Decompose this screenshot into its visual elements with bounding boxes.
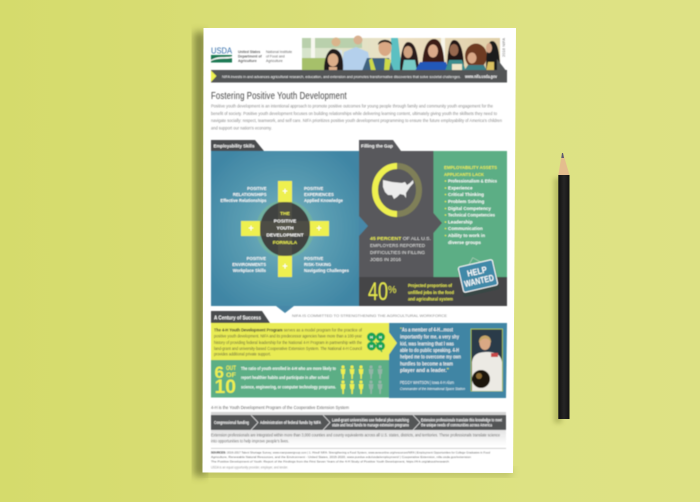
step: land-grant xyxy=(332,418,410,428)
extension paragraph xyxy=(211,430,506,446)
icon: 4-H clover: H xyxy=(379,344,382,348)
list: employability assets: Leadership xyxy=(448,220,473,224)
label: positive experiences: POSITIVE xyxy=(304,186,324,191)
label: positive environments: Workplace Skills xyxy=(233,268,267,273)
text: projected proportion: unfilled jobs in the food xyxy=(408,290,454,295)
quote attribution xyxy=(400,380,465,391)
quote text: kid, was learning that I was xyxy=(400,342,454,348)
panel: 4-H program: The 4-H Youth Development Program serves as a model program for the practice of xyxy=(214,328,363,332)
list: employability assets xyxy=(444,165,498,245)
quote text: able to do public speaking. 4-H xyxy=(400,348,459,354)
step: extension professionals: the unique needs of communities across America xyxy=(421,422,493,428)
subheading: workforce: NIFA IS COMMITTED TO STRENGTHENING THE AGRICULTURAL WORKFORCE xyxy=(292,313,447,318)
formula diagram xyxy=(241,181,329,277)
sources: Agriculture, Renewable Natural Resources, and the Environment - United States, 2015-2020, www.purdue.edu/usda/employment/ | Cooperative Extension, nifa.usda.gov/extension xyxy=(211,455,471,459)
formula diagram: DEVELOPMENT xyxy=(266,232,304,238)
USDA logo xyxy=(211,46,232,62)
panel: quote xyxy=(388,323,507,398)
quote attribution: PEGGY WHITSON | Iowa 4-H Alum xyxy=(400,380,454,385)
panel: 6 out of 10 xyxy=(211,360,389,398)
quote text xyxy=(400,328,461,374)
paper sheet xyxy=(194,28,516,477)
panel: 4-H program: provides additional private support. xyxy=(214,352,271,356)
process bar xyxy=(211,412,506,430)
step: congressional funding: Congressional funding xyxy=(214,420,249,425)
stat text: 45 percent: EMPLOYERS REPORTED xyxy=(370,243,425,249)
formula diagram: YOUTH xyxy=(276,226,294,232)
department name: Department of xyxy=(238,54,263,58)
extension paragraph: into opportunities to help improve people's lives. xyxy=(211,438,289,444)
arrow: grey into green xyxy=(434,213,442,233)
list: employability assets: Critical Thinking xyxy=(448,192,484,197)
department name: of Food and xyxy=(266,54,285,58)
icon: 4-H clover xyxy=(367,332,385,352)
quote text: helped me to overcome my own xyxy=(400,354,461,360)
intro paragraph xyxy=(211,104,502,130)
label: positive experiences: Applied Knowledge xyxy=(304,198,344,203)
vertical edition label: 2018 NIFA xyxy=(502,37,506,57)
list: employability assets: Communication xyxy=(448,226,483,231)
department name: Agriculture xyxy=(266,59,283,63)
mission banner: www.nifa.usda.gov xyxy=(464,74,498,79)
quote text: importantly for me, a very shy xyxy=(400,334,459,340)
text: projected proportion: and agricultural system xyxy=(408,296,453,302)
intro paragraph: navigate socially: respect, teamwork, and self care. NIFA prioritizes positive youth development programming to ensure the future employability of America's children xyxy=(211,118,502,123)
donut chart: 45 percent xyxy=(375,166,419,214)
text: projected proportion: Projected proportion of xyxy=(408,283,452,288)
caption: 4-H system: 4-H is the Youth Development Program of the Cooperative Extension System xyxy=(211,405,349,410)
panel: employability skills xyxy=(211,140,359,306)
stat: 6 out of 10 xyxy=(214,363,236,398)
quote text: hurdles to become a team xyxy=(400,362,453,368)
department name: Agriculture xyxy=(238,59,257,63)
formula diagram: + xyxy=(248,223,254,233)
mission banner xyxy=(211,70,507,82)
footer: USDA is an equal opportunity provider, employer, and lender. xyxy=(211,466,288,470)
list: employability assets: Professionalism & Ethics xyxy=(448,178,497,184)
intro paragraph: Positive youth development is an intentional approach to promote positive outcomes for young people through family and community youth engagement for the xyxy=(211,104,493,108)
step: extension professionals xyxy=(421,418,502,428)
formula diagram: + xyxy=(282,186,288,196)
tab: filling the gap xyxy=(359,140,401,151)
panel: filling the gap xyxy=(359,140,507,306)
icon: 4-H clover: H xyxy=(370,344,373,348)
text: ratio of youth: report healthier habits and participate in after school xyxy=(241,375,329,380)
stat: 6 out of 10: 6 xyxy=(214,363,224,382)
label: positive relationships xyxy=(220,186,267,203)
photo of students xyxy=(302,36,500,71)
title: Fostering Positive Youth Development xyxy=(211,90,347,101)
pencil xyxy=(554,153,570,423)
icon: US map xyxy=(383,180,414,199)
formula diagram: THE xyxy=(280,211,291,217)
panel: 4-H program xyxy=(211,323,389,360)
text: ratio of youth xyxy=(241,366,336,390)
label: positive risk-taking: Navigating Challenges xyxy=(304,268,350,273)
text: ratio of youth: science, engineering, or computer technology programs. xyxy=(241,384,336,390)
quote text: player and a leader." xyxy=(400,368,450,374)
step: extension professionals: Extension professionals translate this knowledge to meet xyxy=(421,418,502,422)
tab: a century of success xyxy=(211,311,270,323)
intro paragraph: and support our nation's economy. xyxy=(211,126,272,130)
USDA logo: USDA xyxy=(211,46,232,56)
panel: 4-H program: land-grant and university-based Cooperative Extension System. The National 4-H Council xyxy=(214,346,362,351)
text: projected proportion xyxy=(408,283,454,302)
list: employability assets: Technical Competencies xyxy=(448,212,495,218)
formula diagram: + xyxy=(282,261,288,271)
tab: employability skills: Employability Skills xyxy=(214,144,255,148)
label: positive environments xyxy=(232,256,267,273)
stat: 6 out of 10: 10 xyxy=(214,377,236,398)
step: administration: Administration of federal funds by NIFA xyxy=(260,420,321,425)
mission banner: NIFA invests in and advances agricultural research, education, and extension and promotes transformative discoveries that solve societal challenges. xyxy=(222,74,461,79)
40 percent stat: % xyxy=(388,285,397,296)
sources: The Positive Development of Youth: Report of the Findings from the First Seven Years of the 4-H Study of Positive Youth Development, https://4-h.org/about/research xyxy=(211,460,449,464)
astronaut photo xyxy=(471,329,502,391)
intro paragraph: benefit of society. Positive youth development focuses on building relationships while delivering learning content, ultimately giving youth the skillsets they need to xyxy=(211,111,497,116)
icon: 4-H clover: H xyxy=(370,334,373,340)
label: positive relationships: RELATIONSHIPS xyxy=(233,192,267,197)
tab: filling the gap: Filling the Gap xyxy=(361,144,393,148)
icon: help wanted sign: WANTED xyxy=(463,273,495,289)
label: positive experiences xyxy=(304,186,344,203)
sources: SOURCES: 2016-2017 Talent Shortage Survey, www.manpowergroup.com | 1. Hired! NIFA: Strengthening a Food System, www.aeseonline.org/resources/NIFA | Employment Opportunities for College Graduates in Food xyxy=(211,450,490,454)
stat: 6 out of 10: OF xyxy=(226,372,236,379)
panel: 4-H program: history of providing federal leadership for the National 4-H Program in partnership with the xyxy=(214,340,362,345)
40 percent stat: 40 xyxy=(368,278,388,306)
stat text: 45 percent xyxy=(370,236,431,263)
tab: a century of success: A Century of Success xyxy=(214,316,261,322)
list: employability assets: diverse groups xyxy=(448,240,481,245)
label: positive risk-taking xyxy=(304,256,350,273)
step: land-grant: Land-grant universities use federal plus matching xyxy=(332,418,409,422)
pictogram: people xyxy=(341,365,382,394)
panel: a century of success xyxy=(211,311,507,398)
list: employability assets: EMPLOYABILITY ASSETS xyxy=(444,165,498,171)
list: employability assets: Problem Solving xyxy=(448,199,484,204)
icon: help wanted sign: HELP xyxy=(466,264,488,279)
arrow: blue into grey xyxy=(359,216,368,236)
header xyxy=(211,36,507,82)
list: employability assets: Experience xyxy=(448,186,473,190)
label: positive risk-taking: RISK-TAKING xyxy=(304,262,331,267)
quote attribution: Commander of the International Space Station xyxy=(400,387,465,391)
label: positive experiences: EXPERIENCES xyxy=(304,192,334,197)
stat: 6 out of 10: OUT xyxy=(226,366,236,372)
tab: employability skills xyxy=(211,140,264,151)
stat text: 45 percent: 45 PERCENT OF ALL U.S. xyxy=(370,236,431,242)
label: positive environments: ENVIRONMENTS xyxy=(232,262,266,267)
banner corner fold xyxy=(497,59,507,82)
panel: 4-H program: positive youth development. NIFA and its predecessor agencies have more than a 100-year xyxy=(214,334,362,338)
arrow: panel down pointer xyxy=(276,306,294,313)
stat text: 45 percent: DIFFICULTIES IN FILLING xyxy=(370,250,425,256)
icon: help wanted sign xyxy=(456,253,500,297)
label: positive risk-taking: POSITIVE xyxy=(304,256,324,261)
stat text: 45 percent: JOBS IN 2016 xyxy=(370,257,401,263)
department name: National Institute xyxy=(266,50,292,54)
step: land-grant: state and local funds to manage extension programs xyxy=(332,422,410,428)
list: employability assets: APPLICANTS LACK xyxy=(444,172,484,178)
department name xyxy=(238,50,292,63)
label: positive relationships: Effective Relationships xyxy=(220,198,267,203)
list: employability assets: Ability to work in xyxy=(448,233,485,238)
list: employability assets: Digital Competency xyxy=(448,206,491,211)
arrow: yellow pointer xyxy=(388,331,397,356)
formula diagram: FORMULA xyxy=(273,240,298,246)
quote text: "As a member of 4-H...most xyxy=(400,328,453,334)
text: ratio of youth: The ratio of youth enrolled in 4-H who are more likely to xyxy=(241,366,336,371)
department name: United States xyxy=(238,50,260,54)
formula diagram: + xyxy=(316,223,322,233)
label: positive environments: POSITIVE xyxy=(247,256,266,261)
formula diagram: POSITIVE xyxy=(274,218,297,224)
label: positive relationships: POSITIVE xyxy=(247,186,267,191)
icon: 4-H clover: H xyxy=(379,334,382,340)
extension paragraph: Extension professionals are integrated within more than 3,000 counties and county equivalents across all U.S. states, districts, and territories. These professionals translate science xyxy=(211,432,500,438)
sources xyxy=(211,450,490,464)
